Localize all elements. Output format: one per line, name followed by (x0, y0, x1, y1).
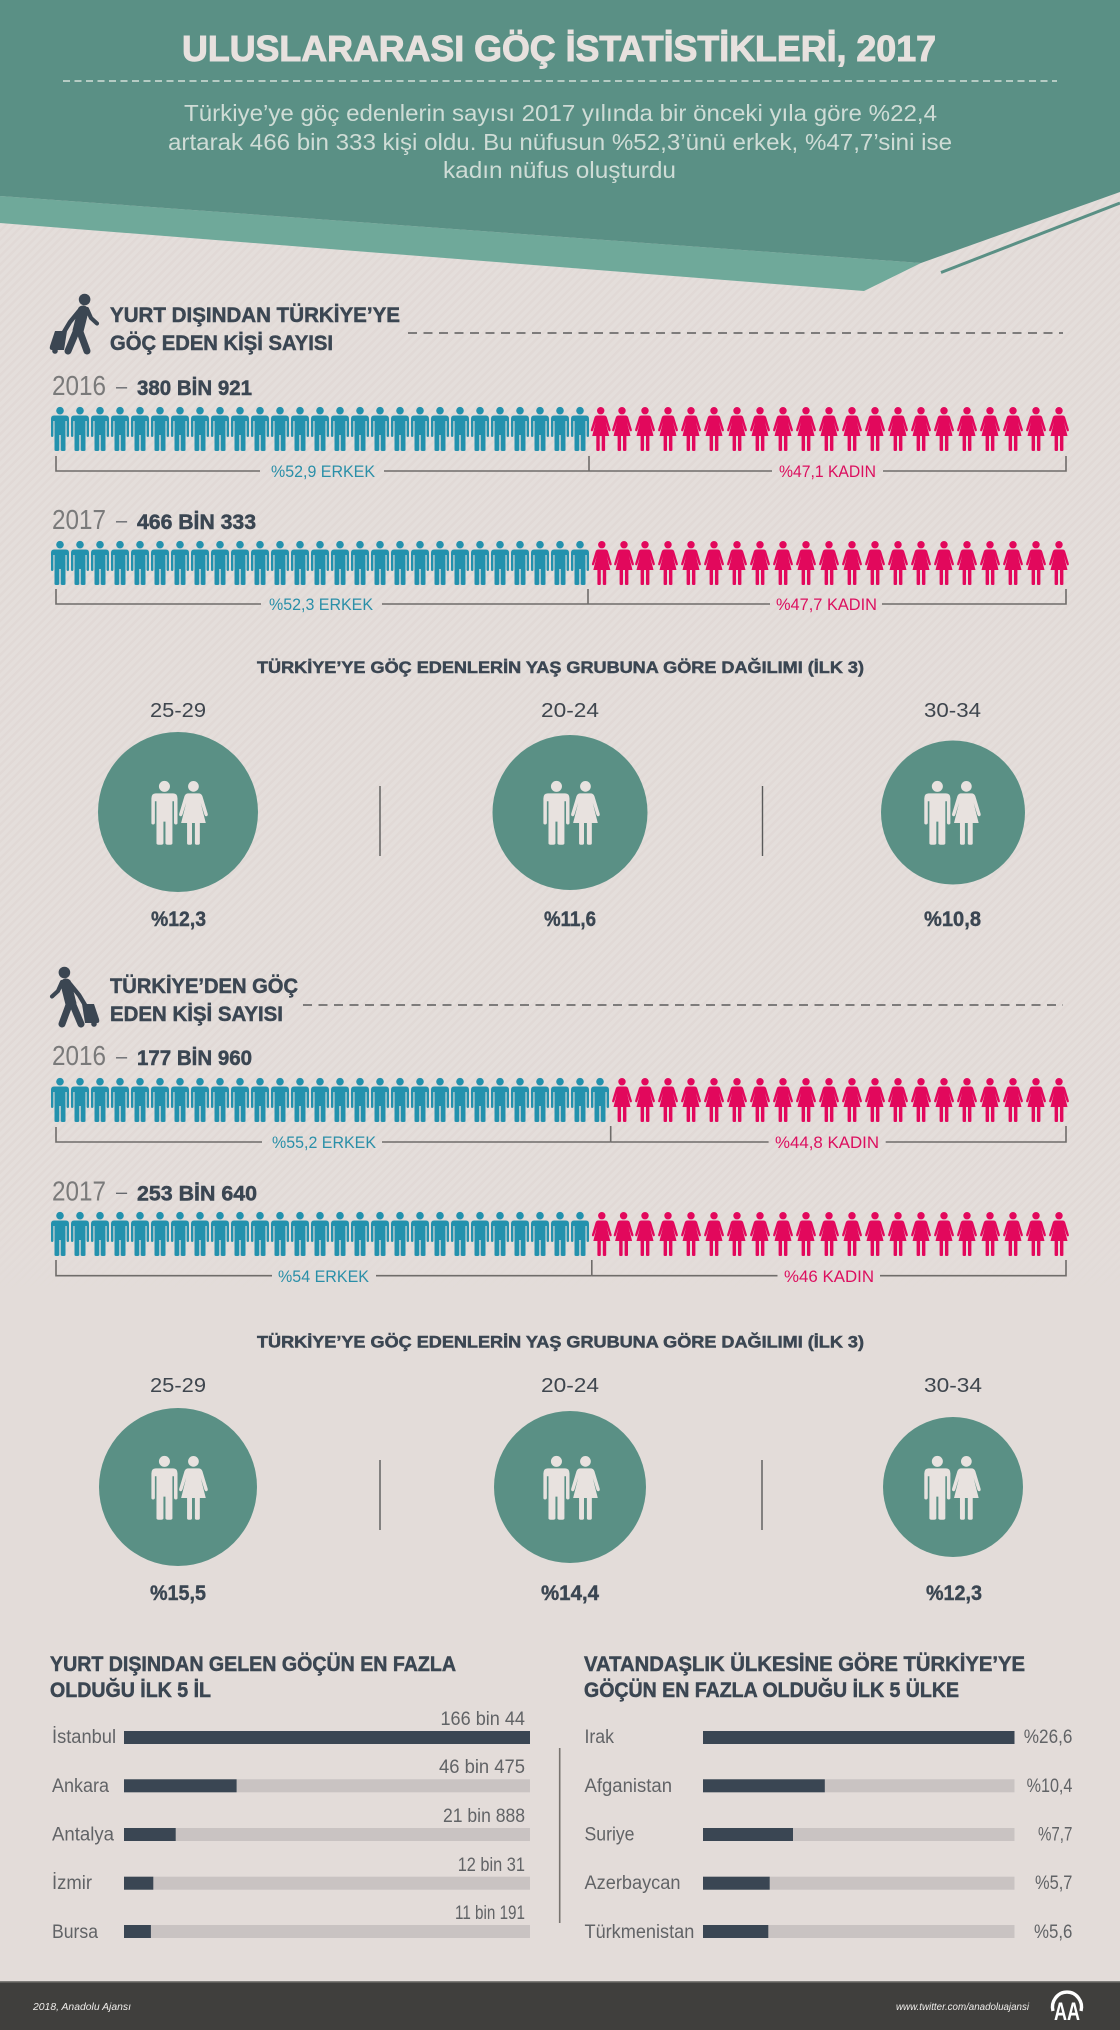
icon: agency logo: AA (1054, 1998, 1080, 2026)
pictogram women (592, 1212, 1069, 1256)
panel heading: VATANDAŞLIK ÜLKESİNE GÖRE TÜRKİYE’YE (584, 1653, 1025, 1676)
bracket women (592, 1260, 1066, 1286)
bar: Türkmenistan: %5,6 (1034, 1922, 1072, 1943)
banner main shape (0, 0, 1120, 263)
year and total (52, 504, 256, 535)
banner accent line (941, 203, 1120, 272)
bracket men (56, 1126, 611, 1152)
age group 25-29: %15,5 (150, 1582, 206, 1605)
age group 25-29 (98, 700, 258, 931)
bracket men: %54 ERKEK (278, 1267, 370, 1286)
age group 30-34: 30-34 (924, 700, 981, 722)
title: ULUSLARARASI GÖÇ İSTATİSTİKLERİ, 2017 (182, 28, 936, 69)
panel heading: YURT DIŞINDAN GELEN GÖÇÜN EN FAZLA (50, 1653, 456, 1676)
bar: Antalya: 21 bin 888 (443, 1806, 525, 1827)
age group 20-24 (494, 1375, 646, 1605)
bracket women: %47,1 KADIN (779, 462, 876, 481)
year and total: 466 BİN 333 (137, 511, 256, 534)
bracket women: %44,8 KADIN (775, 1133, 879, 1152)
bracket men (56, 589, 588, 614)
bar: Bursa: 11 bin 191 (455, 1903, 525, 1924)
section heading (110, 975, 298, 1026)
panel heading (50, 1653, 456, 1702)
age group 20-24: 20-24 (541, 700, 599, 722)
age group 30-34: 30-34 (924, 1375, 982, 1397)
bar: Afganistan: %10,4 (1027, 1776, 1073, 1797)
bar: İstanbul: 166 bin 44 (440, 1709, 525, 1730)
age group 25-29: %12,3 (151, 908, 206, 931)
year and total: 380 BİN 921 (137, 377, 252, 400)
bar: İzmir: 12 bin 31 (458, 1855, 525, 1876)
age groups heading: TÜRKİYE’YE GÖÇ EDENLERİN YAŞ GRUBUNA GÖRE DAĞILIMI (İLK 3) (257, 658, 864, 677)
year and total (52, 1040, 252, 1071)
row 2016 inflow (51, 370, 1069, 481)
bar: Irak: Irak (584, 1727, 614, 1748)
age group 30-34 (883, 1375, 1023, 1605)
section heading: EDEN KİŞİ SAYISI (110, 1003, 283, 1026)
year and total: 2016 (52, 370, 106, 401)
row 2017 outflow (51, 1176, 1069, 1286)
bar: İstanbul: İstanbul (52, 1727, 116, 1748)
bar: İzmir (52, 1855, 530, 1894)
bar: Irak (584, 1727, 1072, 1748)
year and total (52, 370, 252, 401)
footer link: www.twitter.com/anadoluajansi (896, 2001, 1030, 2013)
header banner (0, 0, 1120, 291)
intro text: Türkiye’ye göç edenlerin sayısı 2017 yılında bir önceki yıla göre %22,4 (184, 100, 937, 126)
icon: agency logo (1053, 1992, 1082, 2026)
age group 25-29: 25-29 (150, 1375, 206, 1397)
bar: Azerbaycan: Azerbaycan (584, 1873, 680, 1894)
section: emigration from Türkiye (51, 967, 1069, 1605)
row 2017 inflow (51, 504, 1069, 614)
section heading (110, 304, 400, 355)
intro text: kadın nüfus oluşturdu (443, 157, 676, 183)
panel: top 5 provinces bar chart (50, 1653, 530, 1943)
age group 25-29 (99, 1375, 257, 1605)
bar: Bursa: Bursa (52, 1922, 98, 1943)
bar: Antalya (52, 1806, 530, 1846)
bar: İzmir: İzmir (52, 1873, 93, 1894)
age group 30-34: %12,3 (926, 1582, 982, 1605)
intro text (168, 100, 952, 183)
bar: Azerbaycan (584, 1873, 1072, 1894)
banner light ribbon (0, 196, 921, 291)
age group 20-24 (492, 700, 648, 931)
pictogram men (51, 407, 589, 451)
bracket men: %55,2 ERKEK (272, 1133, 377, 1152)
pictogram men (51, 541, 589, 585)
bar: Ankara: 46 bin 475 (439, 1757, 525, 1778)
bar: Bursa (52, 1903, 530, 1943)
pictogram women (591, 407, 1069, 451)
bar: Azerbaycan: %5,7 (1035, 1873, 1072, 1894)
bar: Türkmenistan: Türkmenistan (584, 1922, 694, 1943)
year and total: 2016 (52, 1040, 106, 1071)
bracket men (56, 456, 589, 481)
year and total: – (116, 1046, 128, 1068)
bracket women: %46 KADIN (784, 1267, 874, 1286)
bar: Suriye: %7,7 (1038, 1824, 1072, 1846)
bracket men: %52,9 ERKEK (271, 462, 376, 481)
bar: Suriye (584, 1824, 1072, 1846)
panel heading (584, 1653, 1025, 1702)
bar: Irak: %26,6 (1024, 1727, 1072, 1748)
age group 20-24: %11,6 (544, 908, 596, 931)
pictogram men (51, 1212, 589, 1256)
bar: Antalya: Antalya (52, 1824, 114, 1846)
bracket men (56, 1260, 592, 1286)
panel heading: GÖÇÜN EN FAZLA OLDUĞU İLK 5 ÜLKE (584, 1678, 959, 1702)
bracket women (611, 1126, 1066, 1152)
bar: Ankara: Ankara (52, 1776, 109, 1797)
bracket men: %52,3 ERKEK (269, 595, 374, 614)
age group 20-24: 20-24 (541, 1375, 599, 1397)
bar: İstanbul (52, 1709, 530, 1748)
year and total (52, 1176, 257, 1207)
year and total: 177 BİN 960 (137, 1047, 252, 1070)
bar: Ankara (52, 1757, 530, 1797)
icon: traveller with suitcase mirrored (52, 967, 99, 1027)
pictogram women (592, 541, 1069, 585)
row 2016 outflow (51, 1040, 1069, 1152)
bracket women: %47,7 KADIN (776, 595, 877, 614)
footer credit: 2018, Anadolu Ajansı (32, 2001, 131, 2013)
pictogram men (51, 1078, 609, 1122)
year and total: – (116, 1182, 128, 1204)
intro text: artarak 466 bin 333 kişi oldu. Bu nüfusun %52,3’ünü erkek, %47,7’sini ise (168, 129, 952, 155)
icon: traveller with suitcase (50, 294, 97, 354)
age groups heading: TÜRKİYE’YE GÖÇ EDENLERİN YAŞ GRUBUNA GÖRE DAĞILIMI (İLK 3) (257, 1333, 864, 1352)
year and total: 2017 (52, 504, 106, 535)
bar: Afganistan (584, 1776, 1073, 1797)
age group 25-29: 25-29 (150, 700, 206, 722)
section: immigration to Türkiye (50, 294, 1069, 931)
section heading: TÜRKİYE’DEN GÖÇ (110, 975, 298, 998)
age group 20-24: %14,4 (541, 1582, 599, 1605)
year and total: 2017 (52, 1176, 106, 1207)
panel heading: OLDUĞU İLK 5 İL (50, 1678, 211, 1702)
bar: Türkmenistan (584, 1922, 1072, 1943)
age group 30-34: %10,8 (924, 908, 981, 931)
pictogram women (612, 1078, 1069, 1122)
section heading: GÖÇ EDEN KİŞİ SAYISI (110, 332, 333, 355)
section heading: YURT DIŞINDAN TÜRKİYE’YE (110, 304, 400, 327)
year and total: – (116, 510, 128, 532)
year and total: – (116, 376, 128, 398)
year and total: 253 BİN 640 (137, 1183, 257, 1206)
footer bar (0, 1981, 1120, 2030)
bracket women (589, 456, 1066, 481)
age group 30-34 (881, 700, 1025, 931)
bar: Afganistan: Afganistan (584, 1776, 672, 1797)
panel: top 5 countries bar chart (584, 1653, 1073, 1943)
bar: Suriye: Suriye (584, 1824, 634, 1846)
bracket women (588, 589, 1066, 614)
